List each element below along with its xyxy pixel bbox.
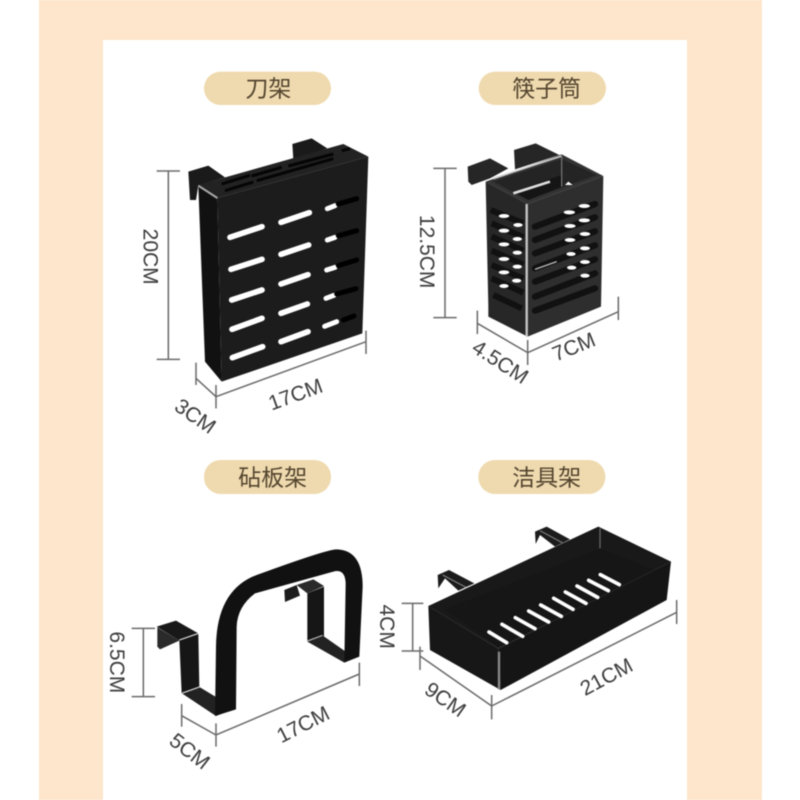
dimension: height 4CM [375, 603, 423, 651]
dimension: width 17CM: 17CM [265, 375, 326, 415]
label pill: knife rack: 刀架 [245, 76, 291, 102]
dimension: height 20CM: 20CM [138, 229, 161, 285]
dimension: height 6.5CM [105, 628, 155, 697]
panel: cutting board rack [105, 460, 363, 774]
label pill: cutting board rack [204, 460, 331, 494]
dimension: depth 4.5CM: 4.5CM [468, 336, 532, 389]
panel: knife rack [138, 72, 368, 439]
label pill: chopstick holder [479, 72, 606, 105]
label pill: chopstick holder: 筷子筒 [512, 76, 581, 102]
dimension: width 7CM: 7CM [549, 328, 599, 366]
panel: chopstick holder [415, 72, 618, 389]
dimension: width 17CM: 17CM [273, 702, 333, 748]
dimension: depth 9CM [420, 647, 492, 722]
dimension: width 21CM: 21CM [577, 654, 637, 701]
dimension: height 4CM: 4CM [375, 605, 398, 649]
dimension: width 7CM [528, 297, 618, 366]
dimension: depth 3CM: 3CM [170, 395, 220, 439]
product: cutting board rack [157, 549, 363, 716]
label pill: knife rack [204, 72, 331, 105]
dimension: height 20CM [138, 171, 180, 359]
dimension: width 17CM [216, 331, 366, 415]
dimension: height 6.5CM: 6.5CM [105, 631, 128, 693]
panel: cleaning tool caddy [375, 460, 677, 722]
dimension: height 12.5CM: 12.5CM [415, 215, 438, 288]
dimension: depth 3CM [170, 363, 220, 439]
dimension: height 12.5CM [415, 168, 457, 318]
dimension: width 17CM [216, 663, 359, 748]
dimension: width 21CM [492, 600, 677, 706]
dimension: depth 9CM: 9CM [420, 678, 470, 722]
label pill: cleaning tool caddy: 洁具架 [512, 464, 581, 490]
dimension: depth 5CM: 5CM [165, 729, 214, 774]
product: knife rack [188, 138, 368, 382]
product: cleaning tool caddy [428, 527, 671, 690]
label pill: cleaning tool caddy [478, 460, 605, 494]
dimension: depth 5CM [165, 704, 216, 774]
label pill: cutting board rack: 砧板架 [238, 464, 307, 490]
product: chopstick holder [468, 143, 603, 337]
dimension: depth 4.5CM [468, 311, 532, 389]
